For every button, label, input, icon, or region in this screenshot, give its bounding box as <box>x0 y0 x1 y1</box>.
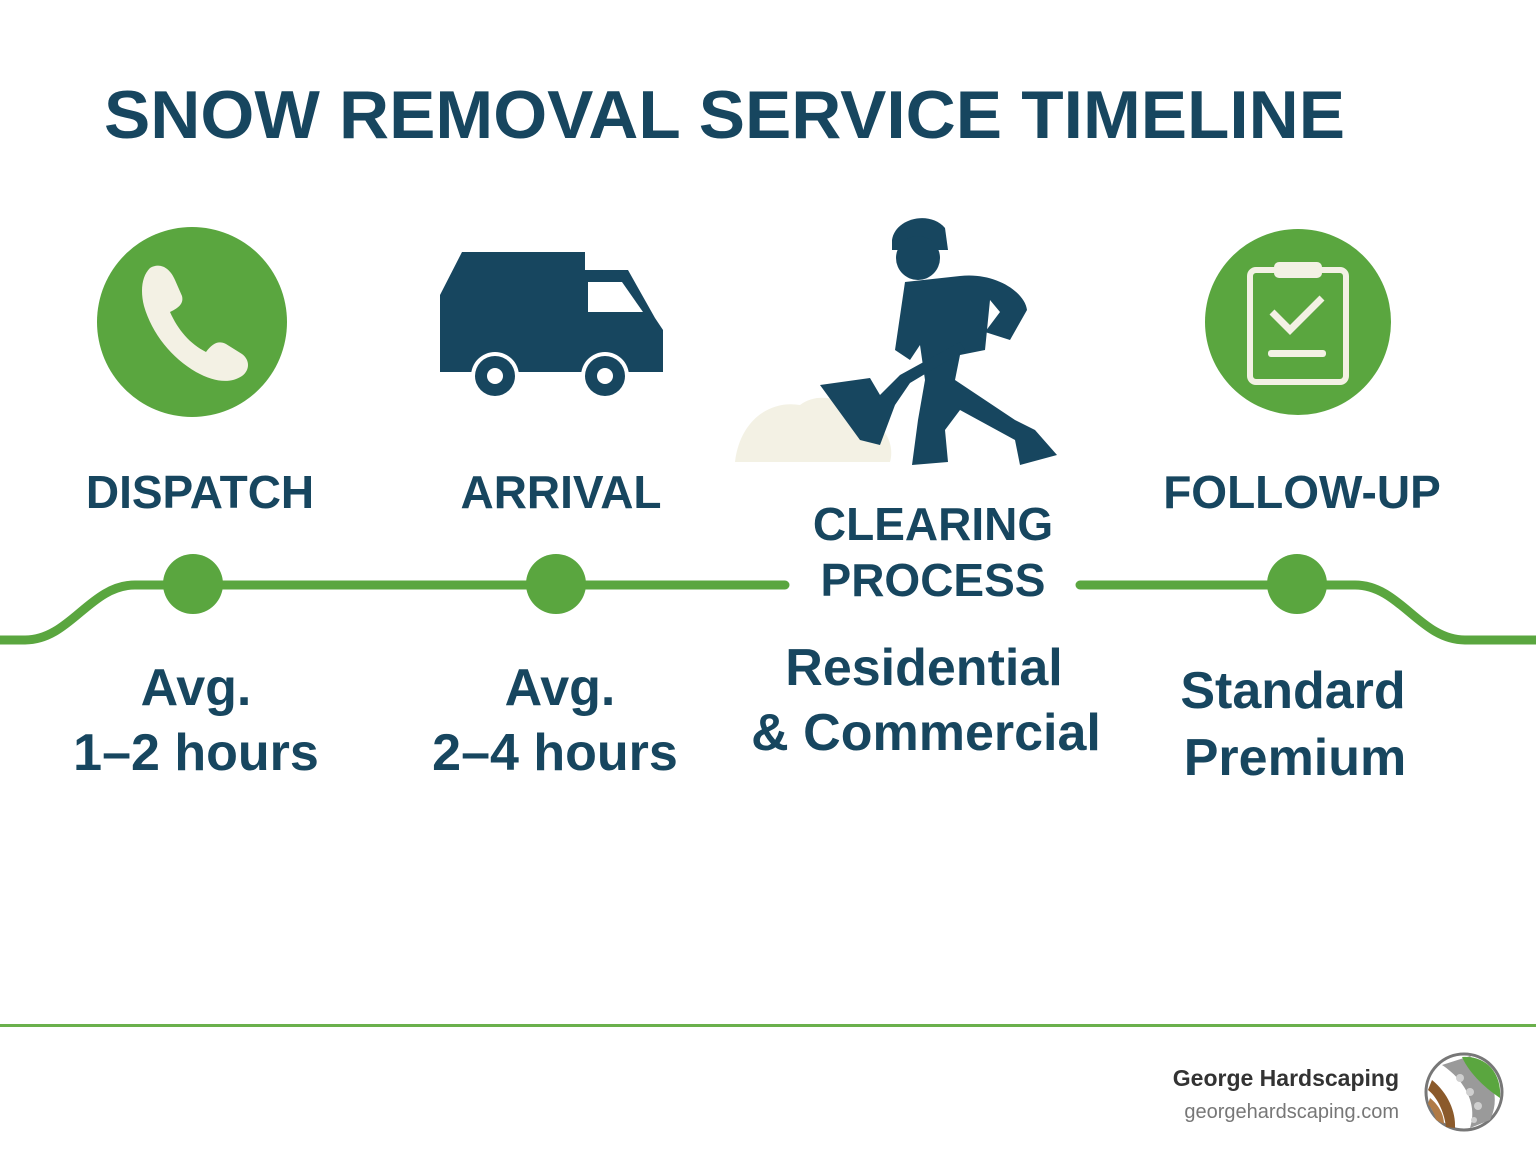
stage details: 1–2 hours <box>73 724 319 782</box>
logo <box>1426 1054 1502 1130</box>
title: SNOW REMOVAL SERVICE TIMELINE <box>104 77 1345 153</box>
stage details: Avg. <box>505 659 615 717</box>
stage labels: CLEARING <box>813 498 1053 550</box>
icon: worker shoveling snow <box>735 218 1057 465</box>
stage details: Standard <box>1180 662 1406 720</box>
icon: truck <box>440 252 663 400</box>
footer divider <box>0 1024 1536 1027</box>
footer brand text <box>1173 1065 1399 1123</box>
stage labels: ARRIVAL <box>460 466 662 518</box>
icon: phone <box>97 227 287 417</box>
stage details: Residential <box>785 639 1063 697</box>
stage details: 2–4 hours <box>432 724 678 782</box>
stage details <box>73 639 1406 787</box>
timeline dots <box>163 554 1327 614</box>
footer brand text: georgehardscaping.com <box>1184 1101 1399 1123</box>
stage labels: FOLLOW-UP <box>1163 466 1441 518</box>
stage details: Premium <box>1184 729 1406 787</box>
stage details: & Commercial <box>751 704 1101 762</box>
stage details: Avg. <box>141 659 251 717</box>
stage labels: DISPATCH <box>86 466 314 518</box>
timeline line <box>0 585 1536 640</box>
footer brand text: George Hardscaping <box>1173 1065 1399 1091</box>
stage labels <box>86 466 1441 606</box>
icon: clipboard <box>1205 229 1391 415</box>
stage labels: PROCESS <box>821 554 1045 606</box>
